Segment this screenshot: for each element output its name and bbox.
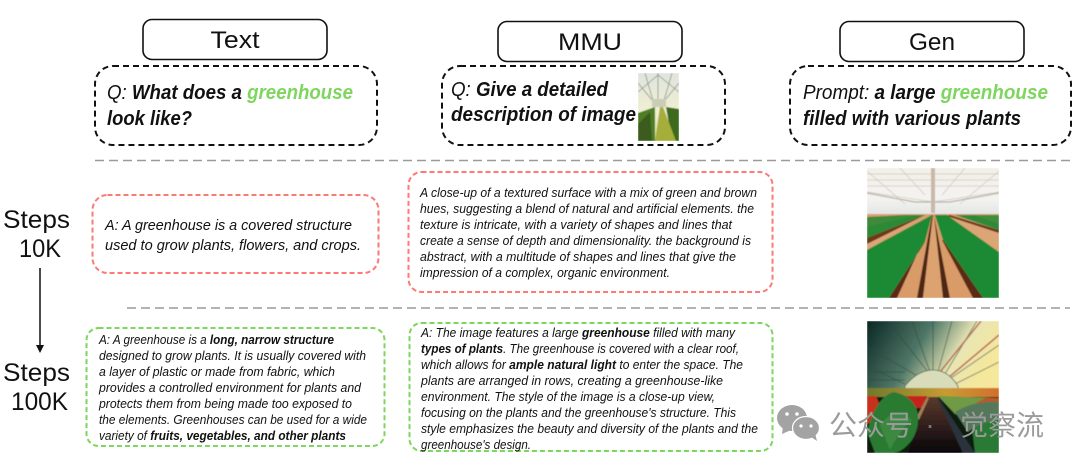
label: Steps 10K: Steps bbox=[3, 206, 70, 234]
label: Steps 10K bbox=[3, 206, 70, 263]
label: Steps 100K: 100K bbox=[11, 388, 68, 416]
watermark: WeChat public account: 公众号 bbox=[829, 410, 913, 441]
label: Steps 100K bbox=[3, 359, 70, 416]
answer box: Text 100K: protects them from being made too exposed to bbox=[98, 396, 352, 411]
answer box: MMU 10K bbox=[408, 172, 772, 292]
image: generated greenhouse at 100K steps bbox=[867, 321, 999, 453]
question box: Text bbox=[95, 66, 377, 145]
watermark: WeChat public account: 觉察流 bbox=[960, 410, 1044, 441]
heading: MMU column bbox=[498, 22, 682, 62]
answer box: MMU 100K: style emphasizes the beauty and diversity of the plants and the bbox=[421, 421, 758, 436]
answer box: MMU 10K: create a sense of depth and dimensionality. the background is bbox=[420, 233, 751, 248]
answer box: Text 100K: designed to grow plants. It is usually covered with bbox=[99, 348, 366, 363]
watermark: WeChat public account bbox=[777, 405, 1044, 441]
arrow: steps progress bbox=[36, 268, 44, 353]
image: generated greenhouse at 10K steps bbox=[867, 168, 999, 298]
answer box: Text 10K: used to grow plants, flowers, and crops. bbox=[105, 237, 361, 254]
heading: Text column: Text bbox=[210, 27, 260, 54]
heading: Gen column bbox=[840, 22, 1024, 62]
question box: MMU bbox=[442, 66, 725, 145]
question box: Gen bbox=[790, 66, 1071, 145]
heading: Gen column: Gen bbox=[909, 29, 955, 56]
answer box: MMU 100K: which allows for ample natural light to enter the space. The bbox=[421, 357, 743, 372]
label: Steps 100K: Steps bbox=[3, 359, 70, 387]
answer box: MMU 10K: A close-up of a textured surface with a mix of green and brown bbox=[419, 185, 757, 200]
question box: Text: look like? bbox=[107, 108, 192, 130]
icon: WeChat bubbles bbox=[777, 405, 820, 441]
question box: Gen: filled with various plants bbox=[803, 108, 1021, 130]
far left rows bbox=[867, 215, 925, 228]
image: greenhouse input thumbnail bbox=[638, 73, 679, 141]
watermark: WeChat public account: · bbox=[925, 409, 935, 440]
answer box: Text 100K: the elements. Greenhouses can be used for a wide bbox=[99, 412, 367, 427]
answer box: Text 10K: A: A greenhouse is a covered structure bbox=[104, 217, 352, 234]
answer box: MMU 100K: focusing on the plants and the greenhouse's structure. This bbox=[421, 405, 736, 420]
answer box: Text 100K: variety of fruits, vegetables, and other plants bbox=[99, 428, 346, 443]
heading: MMU column: MMU bbox=[558, 29, 622, 56]
answer box: MMU 100K: types of plants. The greenhouse is covered with a clear roof, bbox=[421, 341, 739, 356]
question box: Gen: Prompt: a large greenhouse bbox=[803, 82, 1048, 104]
answer box: MMU 10K: abstract, with a multitude of shapes and lines that give the bbox=[420, 249, 736, 264]
answer box: MMU 10K: impression of a complex, organic environment. bbox=[420, 265, 670, 280]
heading: Text column bbox=[143, 20, 327, 60]
answer box: MMU 100K bbox=[410, 323, 772, 452]
near left green bbox=[867, 215, 932, 298]
far right rows bbox=[947, 215, 999, 252]
answer box: MMU 100K: greenhouse's design. bbox=[421, 437, 531, 452]
answer box: Text 10K bbox=[92, 195, 378, 273]
answer box: Text 100K: a layer of plastic or made from fabric, which bbox=[99, 364, 335, 379]
question box: MMU: description of image bbox=[451, 104, 636, 126]
answer box: MMU 10K: hues, suggesting a blend of natural and artificial elements. the bbox=[420, 201, 754, 216]
answer box: MMU 100K: plants are arranged in rows, creating a greenhouse-like bbox=[420, 373, 723, 388]
answer box: MMU 100K: A: The image features a large greenhouse filled with many bbox=[420, 325, 736, 340]
answer box: MMU 100K: environment. The style of the image is a close-up view, bbox=[421, 389, 715, 404]
answer box: MMU 10K: texture is intricate, with a variety of shapes and lines that bbox=[420, 217, 733, 232]
answer box: Text 100K bbox=[86, 328, 384, 446]
question box: Text: Q: What does a greenhouse bbox=[107, 82, 353, 104]
near right green bbox=[935, 215, 999, 298]
question box: MMU: Q: Give a detailed bbox=[451, 79, 609, 101]
answer box: Text 100K: provides a controlled environment for plants and bbox=[98, 380, 362, 395]
label: Steps 10K: 10K bbox=[19, 235, 61, 263]
answer box: Text 100K: A: A greenhouse is a long, narrow structure bbox=[98, 332, 334, 347]
